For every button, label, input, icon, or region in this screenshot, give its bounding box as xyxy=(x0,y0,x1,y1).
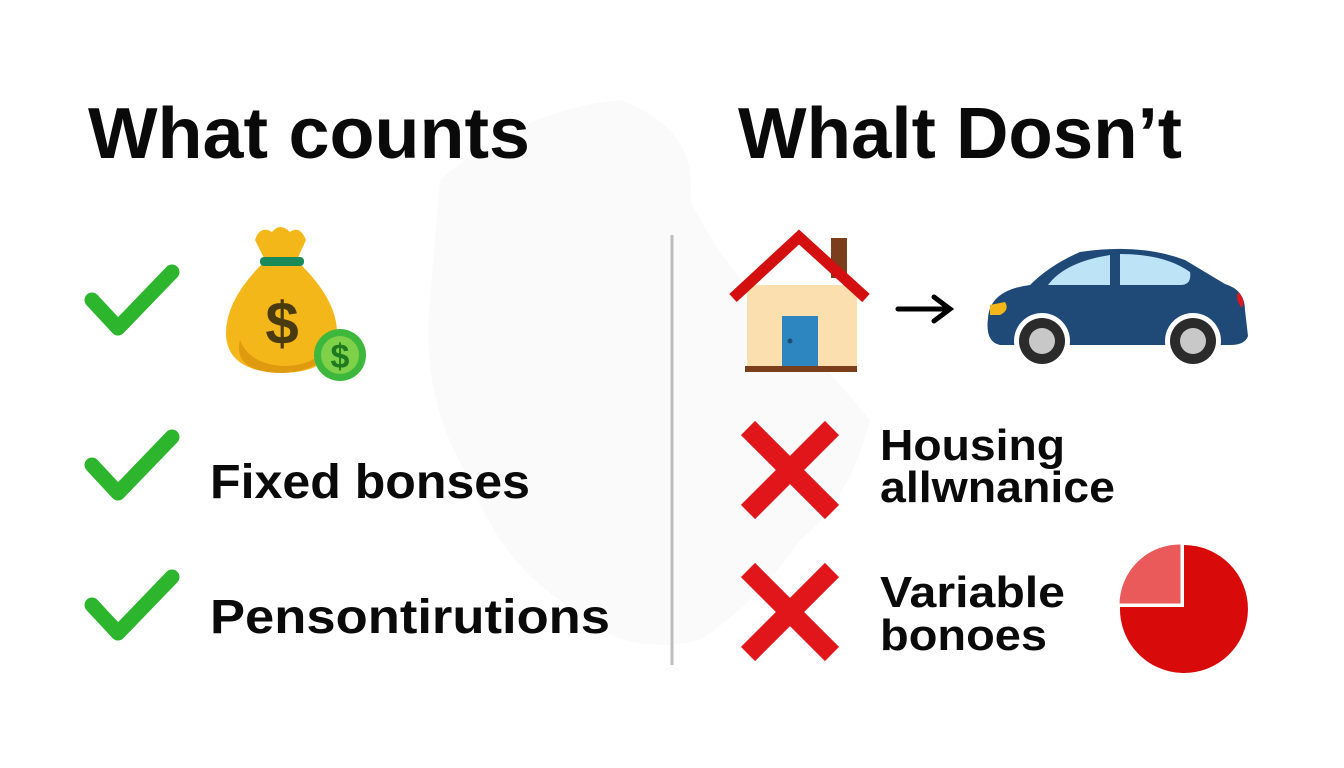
arrow xyxy=(898,297,950,321)
icon: money bag: $ xyxy=(331,338,350,376)
text: Variable bonoes: bonoes xyxy=(880,611,1047,660)
icon: money bag: $ xyxy=(265,290,299,357)
text: Housing allwnanice: Housing xyxy=(880,421,1065,470)
pie chart xyxy=(1118,543,1248,673)
icon: cross 1 xyxy=(748,428,832,512)
icon: cross 2 xyxy=(748,570,832,654)
text: Fixed bonses: Fixed bonses xyxy=(210,456,530,509)
title: What counts: What counts xyxy=(88,94,530,174)
text: Pensontirutions: Pensontirutions xyxy=(210,591,610,644)
icon: check 2 xyxy=(92,437,172,493)
divider xyxy=(670,235,674,665)
icon: money bag xyxy=(226,227,366,381)
icon: check 1 xyxy=(92,272,172,328)
icon: car xyxy=(988,249,1248,369)
text: Variable bonoes: Variable xyxy=(880,568,1065,617)
title: Whalt Dosn't: Whalt Dosn’t xyxy=(738,94,1182,174)
text: Variable bonoes xyxy=(880,568,1065,660)
text: Housing allwnanice: allwnanice xyxy=(880,463,1115,512)
icon: check 3 xyxy=(92,577,172,633)
background map xyxy=(428,100,870,645)
icon: house xyxy=(733,237,866,372)
text: Housing allwnanice xyxy=(880,421,1115,512)
